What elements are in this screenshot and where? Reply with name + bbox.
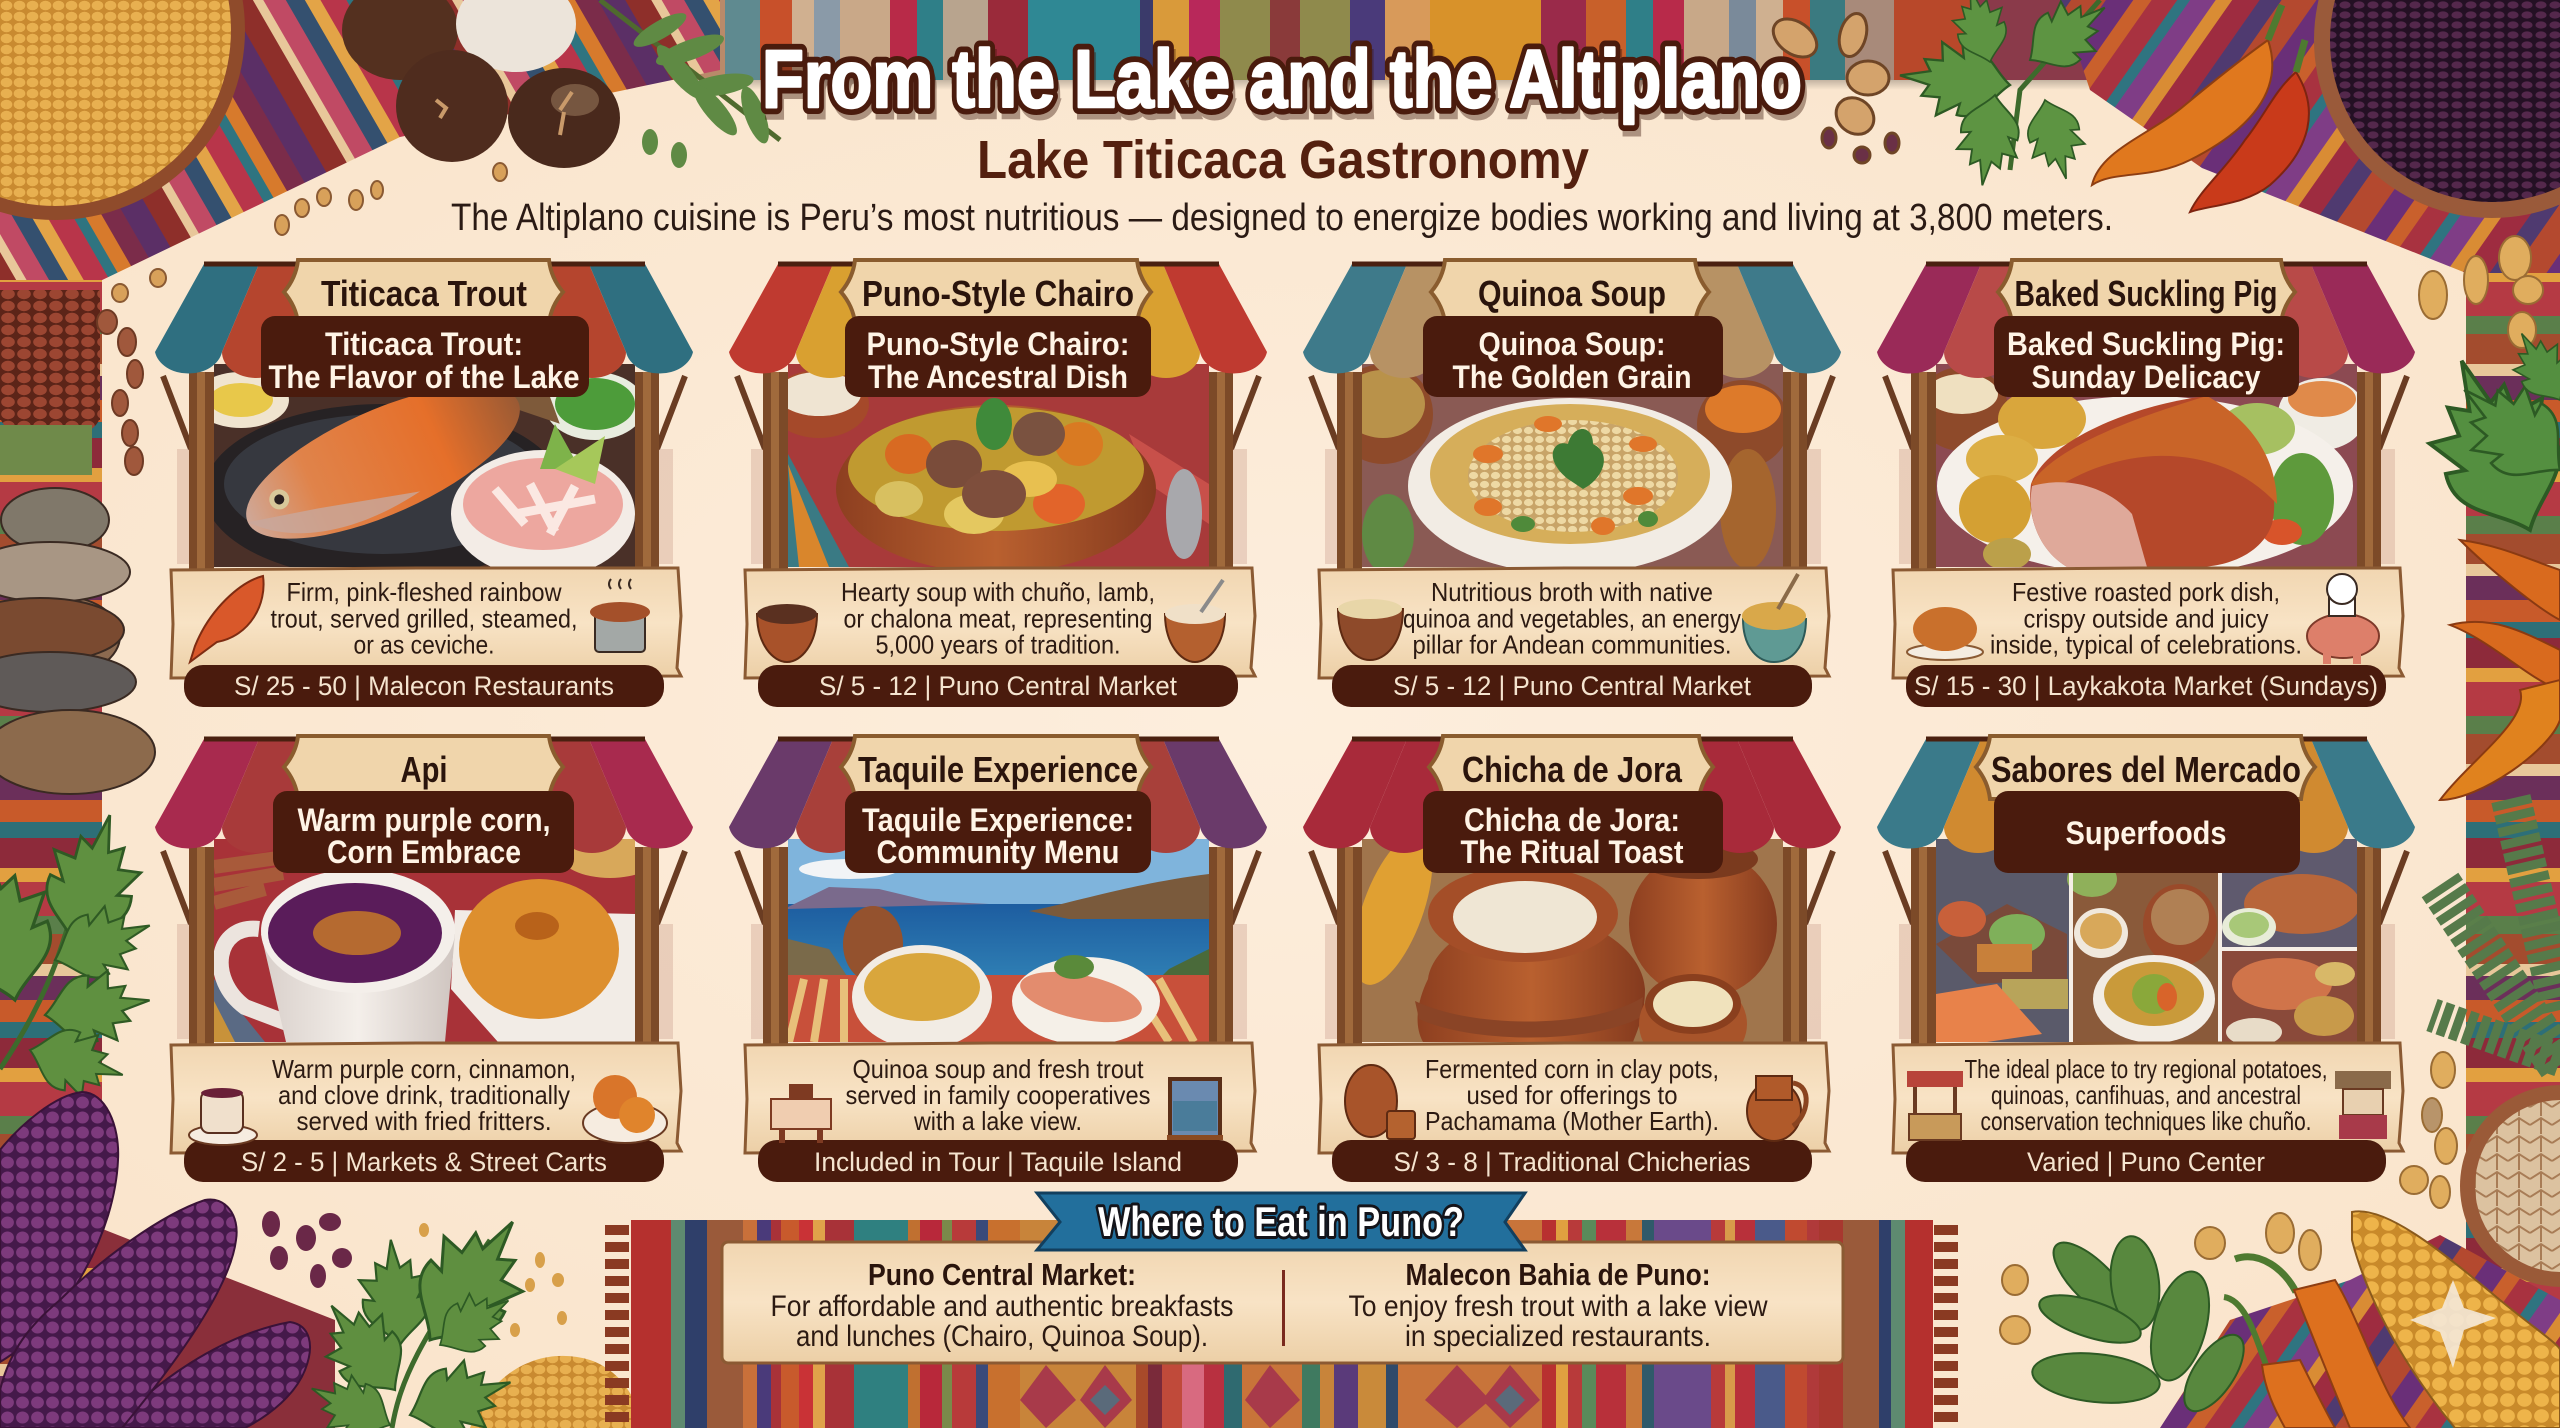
description: pillar for Andean communities. (1412, 630, 1732, 660)
title plate: Warm purple corn, (298, 802, 550, 838)
recommendation: Puno Central Market: Puno Central Market: (868, 1257, 1136, 1292)
sign: Sabores del Mercado (1976, 736, 2315, 799)
description: served in family cooperatives (846, 1080, 1150, 1110)
sign: Quinoa Soup (1431, 260, 1709, 323)
yellow seeds pile bottom (470, 1356, 640, 1428)
description: Firm, pink-fleshed rainbow (286, 577, 562, 607)
title plate (1994, 791, 2300, 873)
icon: roast chicken (1907, 607, 1983, 660)
ribbon heading: Where to Eat in Puno? (1037, 1193, 1525, 1250)
recommendation: Puno Central Market (770, 1257, 1234, 1353)
scattered beans right (2000, 1052, 2457, 1344)
icon: clay pot and cup (1345, 1065, 1415, 1139)
textile frame: left column (0, 280, 102, 1428)
title plate (845, 316, 1151, 397)
card: Chicha de Jora (1303, 736, 1841, 1182)
dish illustration: roast pork (1936, 364, 2357, 567)
yellow corn bottom right (2352, 1211, 2560, 1428)
where to eat panel (722, 1242, 1843, 1363)
sign: Titicaca Trout: Titicaca Trout (321, 273, 527, 314)
recommendation: Puno Central Market: For affordable and authentic breakfasts (770, 1290, 1234, 1323)
sign: Api (284, 736, 563, 799)
ribbon heading: Where to Eat in Puno?: Where to Eat in Puno? (1098, 1198, 1464, 1245)
title plate: Quinoa Soup: (1478, 326, 1666, 362)
title plate (845, 791, 1151, 873)
description: quinoa and vegetables, an energy (1403, 604, 1741, 634)
price and place: Included in Tour | Taquile Island (814, 1147, 1182, 1177)
price and place: S/ 2 - 5 | Markets & Street Carts (241, 1147, 607, 1177)
title: From the Lake and the Altiplano (765, 41, 1805, 132)
recommendation: Puno Central Market: and lunches (Chairo, Quinoa Soup). (796, 1320, 1208, 1353)
card: Api (155, 736, 693, 1182)
herb bottom left (300, 1195, 552, 1428)
description (272, 1054, 576, 1136)
price and place: Varied | Puno Center (2027, 1147, 2265, 1177)
description: Pachamama (Mother Earth). (1425, 1106, 1719, 1136)
dish illustration: clay pots of chicha (1362, 839, 1783, 1042)
textile under purple corn (100, 1228, 335, 1428)
icon: coffee cup (189, 1088, 257, 1145)
description: Nutritious broth with native (1431, 577, 1713, 607)
title plate: Puno-Style Chairo: (866, 326, 1130, 362)
icon: clay jug (1747, 1076, 1806, 1141)
dish illustration: lake view meal (788, 839, 1209, 1049)
icon: bowl with spoon (1165, 580, 1225, 662)
price and place: S/ 15 - 30 | Laykakota Market (Sundays) (1914, 671, 2378, 701)
description (1990, 577, 2302, 660)
description: conservation techniques like chuño. (1980, 1106, 2312, 1136)
sign: Quinoa Soup: Quinoa Soup (1478, 273, 1666, 314)
price and place: S/ 25 - 50 | Malecon Restaurants (234, 671, 614, 701)
recommendation: Malecon Bahia de Puno: in specialized restaurants. (1405, 1320, 1711, 1353)
title plate (273, 791, 574, 873)
description: used for offerings to (1466, 1080, 1678, 1110)
title plate: The Ritual Toast (1460, 834, 1684, 870)
description: Hearty soup with chuño, lamb, (841, 577, 1155, 607)
recommendation: Malecon Bahia de Puno: Malecon Bahia de Puno: (1406, 1257, 1710, 1292)
description: and clove drink, traditionally (278, 1080, 570, 1110)
icon: framed lake picture (1167, 1079, 1223, 1140)
description: Festive roasted pork dish, (2012, 577, 2280, 607)
golden beans right (2419, 236, 2543, 348)
title plate: Sunday Delicacy (2032, 359, 2261, 395)
description: or chalona meat, representing (844, 604, 1152, 634)
icon: market stall (1907, 1071, 1963, 1140)
title plate: Titicaca Trout: (325, 326, 523, 362)
description: quinoas, canfihuas, and ancestral (1991, 1080, 2301, 1110)
sign: Baked Suckling Pig: Baked Suckling Pig (2014, 273, 2278, 314)
herb top right (1897, 0, 2122, 190)
chilies right side (2440, 540, 2560, 800)
title plate: The Golden Grain (1452, 359, 1692, 395)
title plate: Superfoods (2066, 815, 2226, 851)
icon: pig with chef hat (2307, 574, 2379, 664)
recommendation: Malecon Bahia de Puno (1348, 1257, 1768, 1353)
description: trout, served grilled, steamed, (270, 604, 578, 634)
card: Puno-Style Chairo (729, 260, 1267, 707)
title plate (1423, 791, 1723, 873)
card: Quinoa Soup (1303, 260, 1841, 707)
description: Warm purple corn, cinnamon, (272, 1054, 576, 1084)
leaves bottom right (2030, 1231, 2255, 1421)
purple beans and seeds bottom (262, 1211, 567, 1337)
quinoa bowl bottom right (2460, 1085, 2560, 1287)
sign: Api: Api (400, 749, 448, 790)
textile frame: top-right corner (2060, 0, 2560, 300)
orange chilies bottom right (2224, 1257, 2410, 1428)
card: Baked Suckling Pig (1877, 260, 2415, 707)
price and place: S/ 3 - 8 | Traditional Chicherias (1394, 1147, 1750, 1177)
description (270, 577, 578, 660)
sign: Taquile Experience: Taquile Experience (858, 749, 1138, 790)
sign: Puno-Style Chairo: Puno-Style Chairo (862, 273, 1134, 314)
dish illustration: grilled trout (214, 364, 635, 567)
dish illustration: purple corn drink and fritter (214, 830, 660, 1042)
title plate: Baked Suckling Pig: (2007, 326, 2285, 362)
divider (1282, 1270, 1285, 1346)
icon: plate of fritters (583, 1075, 667, 1143)
textile frame: top-left corner (0, 0, 720, 470)
title plate: Chicha de Jora: (1464, 802, 1680, 838)
purple corn bottom left (0, 1092, 310, 1428)
card: Titicaca Trout (155, 260, 693, 707)
description: 5,000 years of tradition. (876, 630, 1120, 660)
description: or as ceviche. (354, 630, 494, 660)
nuts top right (1766, 10, 1899, 163)
description: The ideal place to try regional potatoes, (1964, 1054, 2328, 1084)
title plate (1423, 316, 1723, 397)
icon: cooking pot (590, 579, 650, 652)
icon: set table (771, 1084, 831, 1143)
description (1425, 1054, 1719, 1136)
price and place: S/ 5 - 12 | Puno Central Market (1393, 671, 1751, 701)
chuño potatoes (342, 0, 620, 168)
title: From the Lake and the Altiplano (762, 34, 1802, 125)
title plate: The Ancestral Dish (868, 359, 1128, 395)
right side rosemary herb (2432, 795, 2560, 1065)
red and orange chilies top right (2092, 5, 2309, 212)
title plate (1994, 316, 2299, 397)
description: crispy outside and juicy (2024, 604, 2268, 634)
red beans left (0, 290, 143, 475)
sign: Taquile Experience (841, 736, 1151, 799)
description: Quinoa soup and fresh trout (852, 1054, 1144, 1084)
description (841, 577, 1155, 660)
title plate: Community Menu (876, 834, 1120, 870)
sign: Titicaca Trout (284, 260, 563, 323)
intro sentence: The Altiplano cuisine is Peru’s most nutritious — designed to energize bodies working and living at 3,800 meters. (451, 197, 2113, 239)
description (1403, 577, 1741, 660)
description: with a lake view. (913, 1106, 1082, 1136)
woven rug: where to eat (617, 1220, 1946, 1428)
textile under corn bottom right (2160, 1235, 2560, 1428)
description: Fermented corn in clay pots, (1425, 1054, 1719, 1084)
card: Sabores del Mercado (1877, 736, 2415, 1182)
sign: Chicha de Jora (1429, 736, 1713, 799)
sign: Puno-Style Chairo (841, 260, 1151, 323)
title plate: Corn Embrace (327, 834, 521, 870)
dish illustration: market food collage (1936, 839, 2360, 1046)
title plate (261, 316, 589, 397)
dish illustration: chairo stew (769, 364, 1209, 573)
sign: Sabores del Mercado: Sabores del Mercado (1991, 749, 2301, 790)
card: Taquile Experience (729, 736, 1267, 1182)
title plate: Taquile Experience: (862, 802, 1134, 838)
herb left (0, 804, 161, 1106)
top-left grain bowl (0, 0, 245, 220)
icon: fish (190, 576, 264, 662)
textile frame: right column (2466, 273, 2560, 1428)
scattered lentils top-left (112, 163, 507, 302)
icon: clay bowl (757, 604, 817, 662)
description (1964, 1054, 2328, 1136)
herb sprig top (600, 0, 780, 168)
price and place: S/ 5 - 12 | Puno Central Market (819, 671, 1177, 701)
right side herb upper (2405, 321, 2560, 553)
icon: quinoa bowl (1338, 599, 1403, 660)
title: From the Lake and the Altiplano (762, 34, 1802, 125)
icon: teal bowl with spoon (1742, 574, 1806, 662)
sign: Chicha de Jora: Chicha de Jora (1462, 749, 1683, 790)
icon: market booth (2335, 1071, 2391, 1139)
stacked stones left (0, 488, 155, 794)
sign: Baked Suckling Pig (1998, 260, 2295, 323)
description: served with fried fritters. (296, 1106, 552, 1136)
description (846, 1054, 1150, 1136)
subtitle: Lake Titicaca Gastronomy (977, 130, 1589, 190)
black bean bowl top right (2314, 0, 2560, 218)
recommendation: Malecon Bahia de Puno: To enjoy fresh trout with a lake view (1348, 1290, 1768, 1323)
description: inside, typical of celebrations. (1990, 630, 2302, 660)
textile frame: top band (680, 0, 2100, 90)
title plate: The Flavor of the Lake (268, 359, 580, 395)
dish illustration: quinoa soup (1362, 364, 1783, 567)
